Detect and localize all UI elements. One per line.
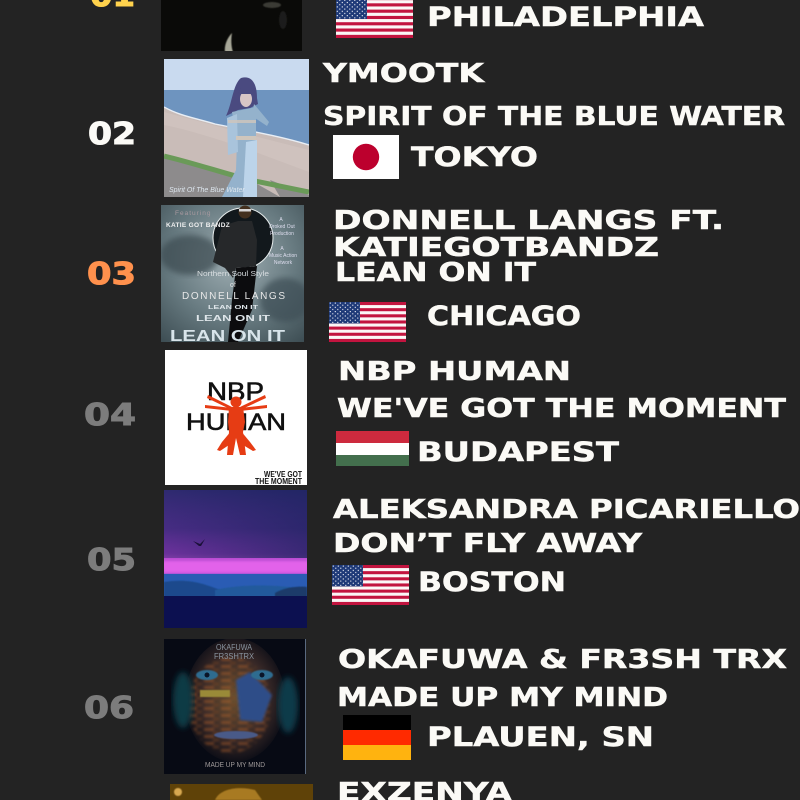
city: Philadelphia: PHILADELPHIA xyxy=(427,2,704,33)
album cover 03: A xyxy=(279,217,283,223)
city: Chicago: CHICAGO xyxy=(427,301,581,332)
album cover 02: Spirit Of The Blue Water xyxy=(169,187,245,194)
album cover 03: LEAN ON IT xyxy=(170,328,285,345)
artist: Ymootk: YMOOTK xyxy=(322,59,485,89)
album cover 03 xyxy=(160,205,310,345)
flag: USA xyxy=(336,0,413,38)
artist: Donnell Langs: DONNELL LANGS FT. xyxy=(333,206,724,236)
flag: USA xyxy=(329,302,406,342)
rank 04: 04 xyxy=(84,398,136,433)
artist: NBP Human: NBP HUMAN xyxy=(338,357,571,387)
album cover 03: of xyxy=(230,282,236,289)
entry 07 xyxy=(170,782,512,800)
album cover 06: FR3SHTRX xyxy=(214,652,255,661)
song title: LEAN ON IT xyxy=(335,258,536,288)
album cover 05 xyxy=(164,490,307,628)
song title: MADE UP MY MIND xyxy=(337,683,668,713)
album cover 03: Production xyxy=(270,231,294,237)
city: Plauen: PLAUEN, SN xyxy=(427,722,654,753)
city: Tokyo: TOKYO xyxy=(411,142,538,173)
entry 03 xyxy=(87,205,724,345)
album cover 03: A xyxy=(280,246,284,252)
flag: Germany xyxy=(343,715,411,760)
album cover 03: Northern Soul Style xyxy=(197,269,269,278)
album cover 06 xyxy=(164,638,306,774)
artist: KatieGotBandz: KATIEGOTBANDZ xyxy=(333,233,659,263)
flag: Hungary xyxy=(336,431,409,466)
album cover 01 xyxy=(161,0,302,52)
rank 06: 06 xyxy=(84,691,134,726)
rank 03: 03 xyxy=(87,257,136,292)
album cover 04: NBP xyxy=(207,378,264,406)
album cover 02 xyxy=(164,59,309,197)
city: Boston: BOSTON xyxy=(418,567,566,598)
entry 05 xyxy=(87,490,800,628)
album cover 07 xyxy=(170,784,313,800)
album cover 03: Music Action xyxy=(269,253,297,259)
album cover 03: KATIE GOT BANDZ xyxy=(166,222,230,229)
song title: SPIRIT OF THE BLUE WATER xyxy=(323,102,785,132)
album cover 03: LEAN ON IT xyxy=(208,305,258,311)
entry 02 xyxy=(88,59,785,197)
album cover 03: LEAN ON IT xyxy=(196,314,270,323)
song title: DON’T FLY AWAY xyxy=(333,529,643,559)
album cover 03: Droked Out xyxy=(269,224,295,230)
album cover 04 xyxy=(165,350,307,486)
album cover 06: MADE UP MY MIND xyxy=(205,760,266,769)
album cover 04: WE'VE GOT xyxy=(264,469,303,479)
entry 06 xyxy=(84,638,787,774)
album cover 03: Network xyxy=(274,260,293,266)
rank 05: 05 xyxy=(87,543,136,578)
artist: Aleksandra Picariello: ALEKSANDRA PICARIELLO xyxy=(333,495,800,525)
flag: USA xyxy=(332,565,409,605)
album cover 04: THE MOMENT xyxy=(255,476,303,486)
album cover 03: DONNELL LANGS xyxy=(182,291,285,302)
artist: Okafuwa & Fr3sh Trx: OKAFUWA & FR3SH TRX xyxy=(338,645,787,675)
flag: Japan xyxy=(333,135,399,179)
city: Budapest: BUDAPEST xyxy=(417,437,620,468)
album cover 03: Featuring xyxy=(175,210,211,217)
entry 01 xyxy=(90,0,704,52)
rank 02: 02 xyxy=(88,117,136,152)
entry 04 xyxy=(84,350,786,486)
album cover 06: OKAFUWA xyxy=(216,643,253,652)
album cover 04: HUMAN xyxy=(186,409,286,436)
song title: WE'VE GOT THE MOMENT xyxy=(337,394,786,424)
